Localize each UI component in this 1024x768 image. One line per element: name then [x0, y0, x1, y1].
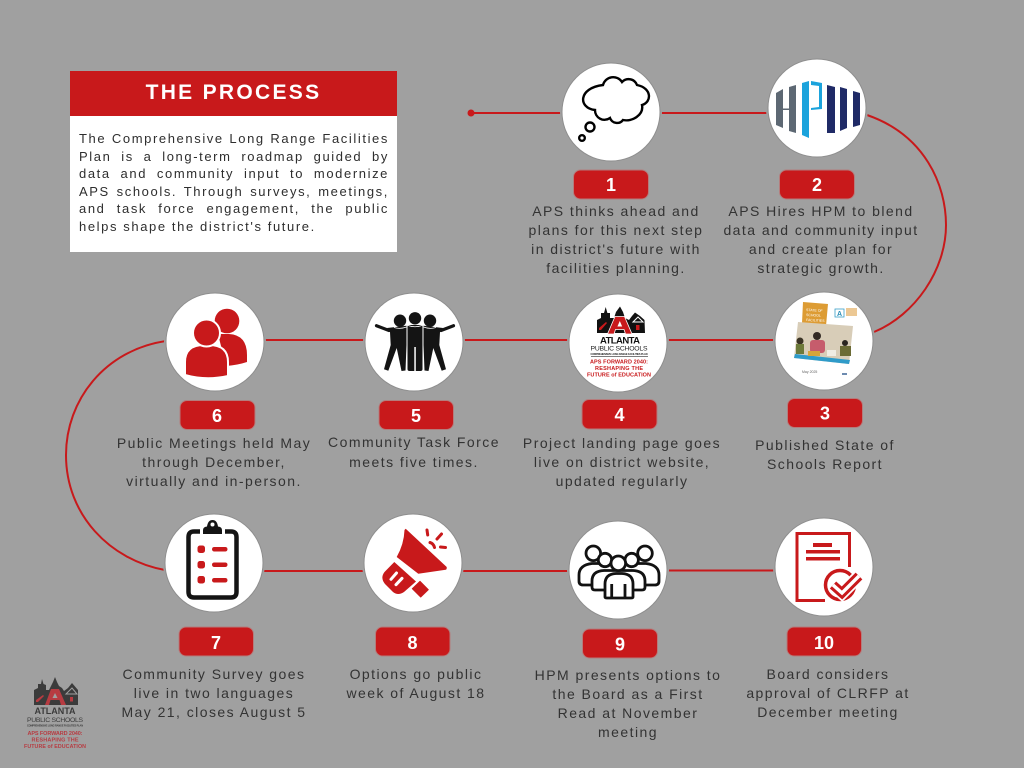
step 10 text: December meeting [757, 704, 899, 720]
step 2: hires HPM [723, 57, 919, 276]
step 3: state of schools report [755, 290, 895, 472]
step 6: public meetings: 6 [212, 406, 222, 426]
panel body text: data and community input to modernize [79, 166, 389, 181]
step 9 text: the Board as a First [552, 686, 704, 702]
step 10 text: Board considers [767, 666, 889, 682]
footer logo: Atlanta Public Schools: APS FORWARD 2040: [28, 731, 83, 737]
step 4 text: updated regularly [556, 473, 688, 489]
step 7 text: live in two languages [134, 685, 294, 701]
icon: APS logo: FUTURE of EDUCATION [587, 372, 651, 378]
step 1 text: plans for this next step [529, 222, 703, 238]
icon: three people arm in arm [376, 312, 454, 372]
step 8 text: Options go public [350, 666, 482, 682]
icon: APS logo: RESHAPING THE [595, 366, 643, 372]
icon: megaphone [382, 529, 447, 597]
step 7 text: May 21, closes August 5 [121, 704, 307, 720]
step 10: board considers approval [746, 516, 910, 720]
step 4: project landing page: 4 [614, 405, 625, 425]
footer logo: Atlanta Public Schools: COMPREHENSIVE LONG RANGE FACILITIES PLAN [27, 724, 83, 728]
step 9 text: HPM presents options to [535, 667, 721, 683]
icon: APS logo [587, 306, 651, 378]
step 3 text: Schools Report [767, 456, 883, 472]
step 2 text: data and community input [723, 222, 919, 238]
step 9: HPM presents options [535, 519, 721, 740]
step 10 text: approval of CLRFP at [746, 685, 910, 701]
icon: APS logo: APS FORWARD 2040: [590, 360, 648, 366]
step 4: project landing page [523, 292, 721, 489]
step 2: hires HPM: 2 [812, 175, 822, 195]
heading [70, 71, 397, 116]
step 1 text: facilities planning. [546, 260, 686, 276]
footer logo: Atlanta Public Schools: PUBLIC SCHOOLS [27, 717, 83, 724]
icon: report cover: SCHOOL [806, 313, 821, 318]
step 6 text: through December, [142, 454, 286, 470]
step 1: thinks ahead: 1 [606, 175, 616, 195]
icon: report cover: FACILITIES [806, 318, 825, 323]
step 2 text: strategic growth. [757, 260, 885, 276]
icon: two people [185, 309, 247, 378]
panel body text: APS schools. Through surveys, meetings, [79, 184, 389, 199]
icon: APS logo: PUBLIC SCHOOLS [590, 346, 648, 352]
footer logo: Atlanta Public Schools [24, 677, 86, 750]
step 5: community task force [328, 291, 500, 470]
panel body text: The Comprehensive Long Range Facilities [79, 131, 389, 146]
step 3: state of schools report: 3 [820, 404, 830, 424]
step 9: HPM presents options: 9 [615, 634, 625, 654]
icon: report cover: May 2025 [802, 370, 817, 374]
footer logo: Atlanta Public Schools: ATLANTA [34, 706, 76, 716]
footer logo: Atlanta Public Schools: RESHAPING THE [32, 738, 79, 744]
step 9 text: Read at November [558, 705, 698, 721]
step 8 text: week of August 18 [345, 685, 486, 701]
icon: document with check [797, 534, 859, 600]
step 10: board considers approval: 10 [814, 633, 834, 653]
step 6 text: virtually and in-person. [126, 473, 302, 489]
icon: thought cloud [579, 77, 649, 141]
step 2 text: and create plan for [749, 241, 893, 257]
step 1: thinks ahead [529, 61, 703, 276]
step 7: community survey: 7 [211, 633, 221, 653]
step 1 text: in district's future with [531, 241, 701, 257]
footer logo: Atlanta Public Schools: FUTURE of EDUCATION [24, 744, 86, 750]
icon: group of people [579, 546, 659, 598]
icon: report cover: A [837, 311, 842, 318]
icon: report cover [794, 302, 857, 375]
step 5 text: meets five times. [349, 454, 479, 470]
step 3 text: Published State of [755, 437, 895, 453]
panel: the process [70, 71, 397, 252]
step 9 text: meeting [598, 724, 658, 740]
timeline connector path [66, 110, 946, 571]
step 1 text: APS thinks ahead and [532, 203, 700, 219]
heading: THE PROCESS [146, 81, 321, 104]
icon: clipboard checklist [188, 520, 236, 598]
icon: report cover: STATE OF [806, 308, 823, 313]
step 4 text: live on district website, [534, 454, 710, 470]
panel body text [79, 131, 389, 234]
step 6 text: Public Meetings held May [117, 435, 311, 451]
icon: HPM logo [776, 81, 860, 138]
step 5 text: Community Task Force [328, 434, 500, 450]
step 5: community task force: 5 [411, 406, 421, 426]
icon: APS logo: COMPREHENSIVE LONG RANGE FACILITIES PLAN [590, 353, 648, 356]
step 6: public meetings [117, 291, 311, 489]
step 4 text: Project landing page goes [523, 435, 721, 451]
panel body text: and task force engagement, the public [79, 201, 389, 216]
panel body text: helps shape the district's future. [79, 219, 316, 234]
step 7 text: Community Survey goes [123, 666, 305, 682]
step 7: community survey [121, 512, 307, 720]
step 2 text: APS Hires HPM to blend [728, 203, 914, 219]
step 8: options go public: 8 [407, 633, 418, 653]
panel body text: Plan is a long-term roadmap guided by [79, 149, 389, 164]
step 8: options go public [345, 512, 486, 701]
icon: APS logo: ATLANTA [600, 336, 640, 346]
